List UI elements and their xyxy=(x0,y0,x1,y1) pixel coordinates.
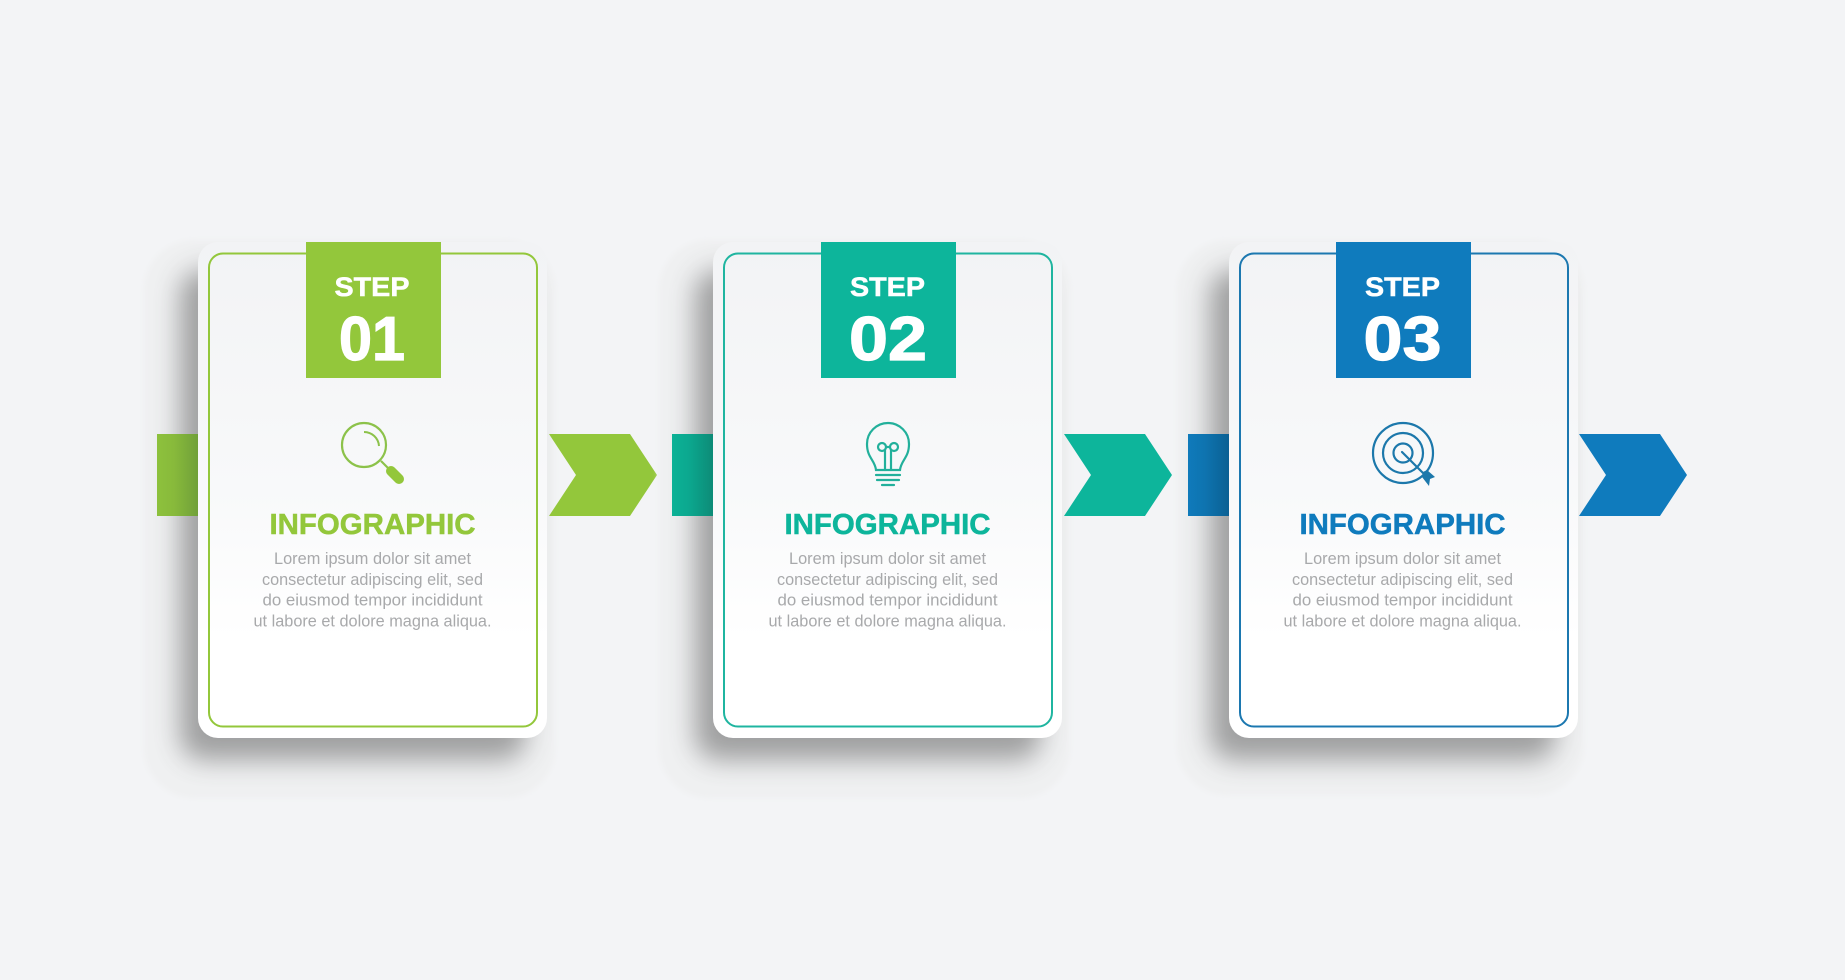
step badge: STEP xyxy=(850,272,925,302)
card halo xyxy=(659,240,1070,798)
card outline xyxy=(1240,254,1568,726)
card shadow xyxy=(1210,270,1556,760)
description text: do eiusmod tempor incididunt xyxy=(262,590,483,610)
card body xyxy=(198,242,547,738)
description text: consectetur adipiscing elit, sed xyxy=(777,570,998,589)
description text: Lorem ipsum dolor sit amet xyxy=(274,549,471,568)
card body xyxy=(713,242,1062,738)
left connector tab xyxy=(672,434,714,516)
description text xyxy=(768,549,1006,630)
card outline xyxy=(209,254,537,726)
description text: Lorem ipsum dolor sit amet xyxy=(1304,549,1501,568)
heading: INFOGRAPHIC xyxy=(1300,509,1506,541)
step badge xyxy=(1336,242,1471,378)
card body xyxy=(1229,242,1578,738)
panel: step 1 xyxy=(144,240,657,798)
description text xyxy=(1284,549,1522,630)
step badge: STEP xyxy=(334,272,410,302)
description text: do eiusmod tempor incididunt xyxy=(1292,590,1513,610)
icon: magnifying glass xyxy=(342,423,399,479)
step badge xyxy=(821,242,956,378)
arrow chevron xyxy=(549,434,657,516)
description text: Lorem ipsum dolor sit amet xyxy=(789,549,986,568)
step badge: 02 xyxy=(849,305,927,374)
left connector tab xyxy=(157,434,199,516)
step badge: STEP xyxy=(1365,272,1440,302)
step badge: 01 xyxy=(339,305,405,374)
description text: ut labore et dolore magna aliqua. xyxy=(1284,612,1522,630)
description text: do eiusmod tempor incididunt xyxy=(778,590,998,610)
card outline xyxy=(724,254,1052,726)
description text xyxy=(254,549,492,630)
step badge xyxy=(306,242,441,378)
description text: ut labore et dolore magna aliqua. xyxy=(768,612,1006,630)
description text: consectetur adipiscing elit, sed xyxy=(1292,570,1513,589)
heading: INFOGRAPHIC xyxy=(270,509,476,541)
arrow chevron xyxy=(1064,434,1172,516)
card halo xyxy=(1177,240,1584,795)
card shadow xyxy=(695,270,1041,760)
step badge: 03 xyxy=(1364,305,1442,374)
card halo xyxy=(144,240,555,798)
heading: INFOGRAPHIC xyxy=(784,509,990,541)
panel: step 2 xyxy=(659,240,1172,798)
arrow chevron xyxy=(1579,434,1687,516)
description text: ut labore et dolore magna aliqua. xyxy=(254,612,492,630)
icon: light bulb xyxy=(867,423,909,485)
panel: step 3 xyxy=(1177,240,1687,795)
description text: consectetur adipiscing elit, sed xyxy=(262,570,483,589)
icon: target with arrow xyxy=(1373,423,1435,486)
left connector tab xyxy=(1188,434,1229,516)
card shadow xyxy=(180,270,526,760)
